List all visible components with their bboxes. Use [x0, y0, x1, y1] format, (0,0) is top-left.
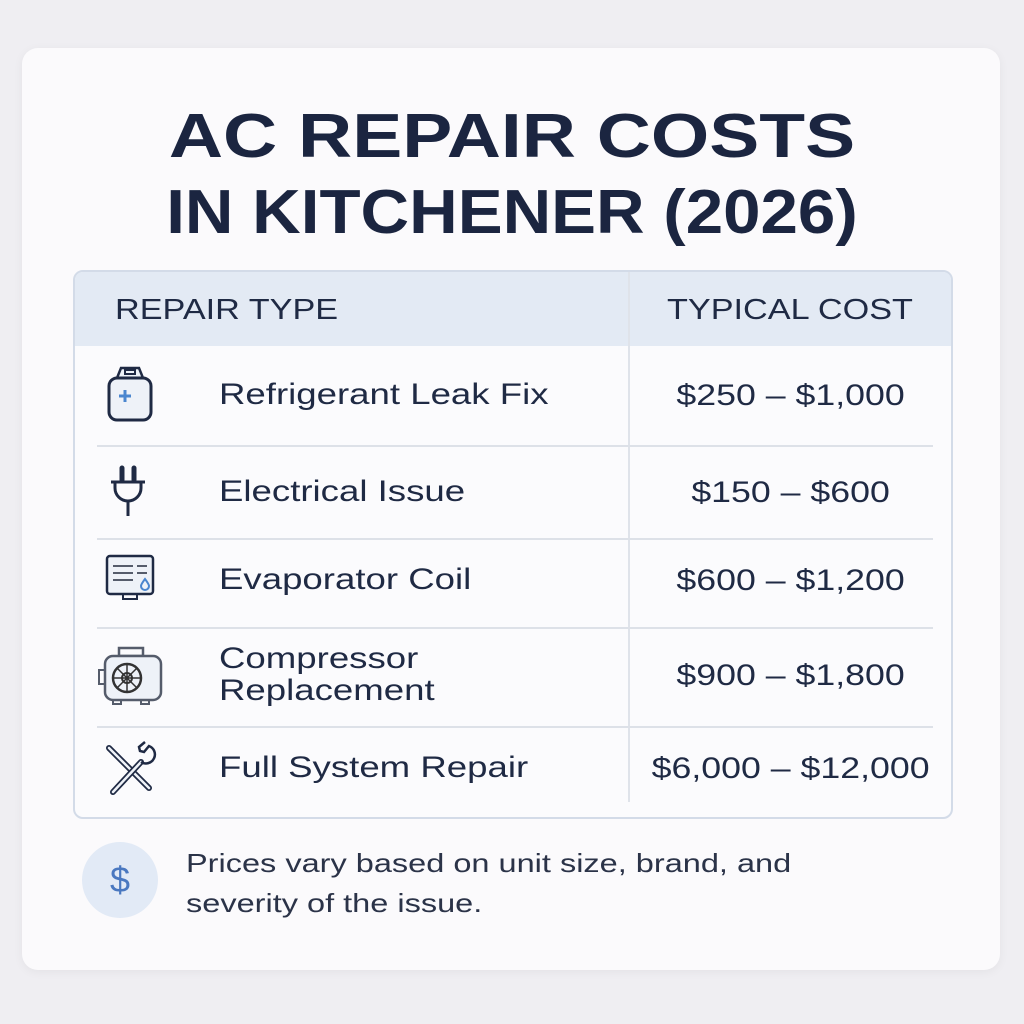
icon: evaporator unit [106, 554, 154, 600]
row: refrigerant: Refrigerant Leak Fix [219, 378, 549, 411]
table header: REPAIR TYPE [115, 294, 338, 326]
row: full system [106, 741, 930, 795]
table header: TYPICAL COST [667, 294, 913, 326]
row: compressor: Compressor [219, 642, 418, 675]
title: AC REPAIR COSTS [169, 102, 855, 171]
row: evaporator: Evaporator Coil [219, 563, 471, 596]
icon: dollar: $ [110, 859, 130, 900]
row: electrical: Electrical Issue [219, 475, 465, 508]
icon: refrigerant tank [108, 366, 152, 422]
icon: plug [111, 466, 145, 516]
icon: tools [106, 741, 156, 795]
row: refrigerant [108, 366, 905, 422]
row: evaporator [106, 554, 905, 600]
row: evaporator: $600 – $1,200 [676, 564, 905, 597]
row: full system: $6,000 – $12,000 [652, 752, 930, 785]
row: compressor: Replacement [219, 674, 435, 707]
row: compressor: $900 – $1,800 [676, 659, 905, 692]
table [73, 270, 953, 819]
footer note: severity of the issue. [186, 888, 482, 918]
title [166, 102, 858, 247]
title: IN KITCHENER (2026) [166, 178, 858, 247]
footer note [186, 848, 791, 918]
icon: compressor [98, 646, 162, 705]
row: full system: Full System Repair [219, 751, 528, 784]
row: compressor [98, 642, 905, 707]
row: refrigerant: $250 – $1,000 [676, 379, 905, 412]
footer note: Prices vary based on unit size, brand, and [186, 848, 791, 878]
row: electrical: $150 – $600 [691, 476, 890, 509]
row: electrical [111, 466, 890, 516]
table header [75, 272, 951, 346]
icon: dollar [82, 842, 158, 918]
